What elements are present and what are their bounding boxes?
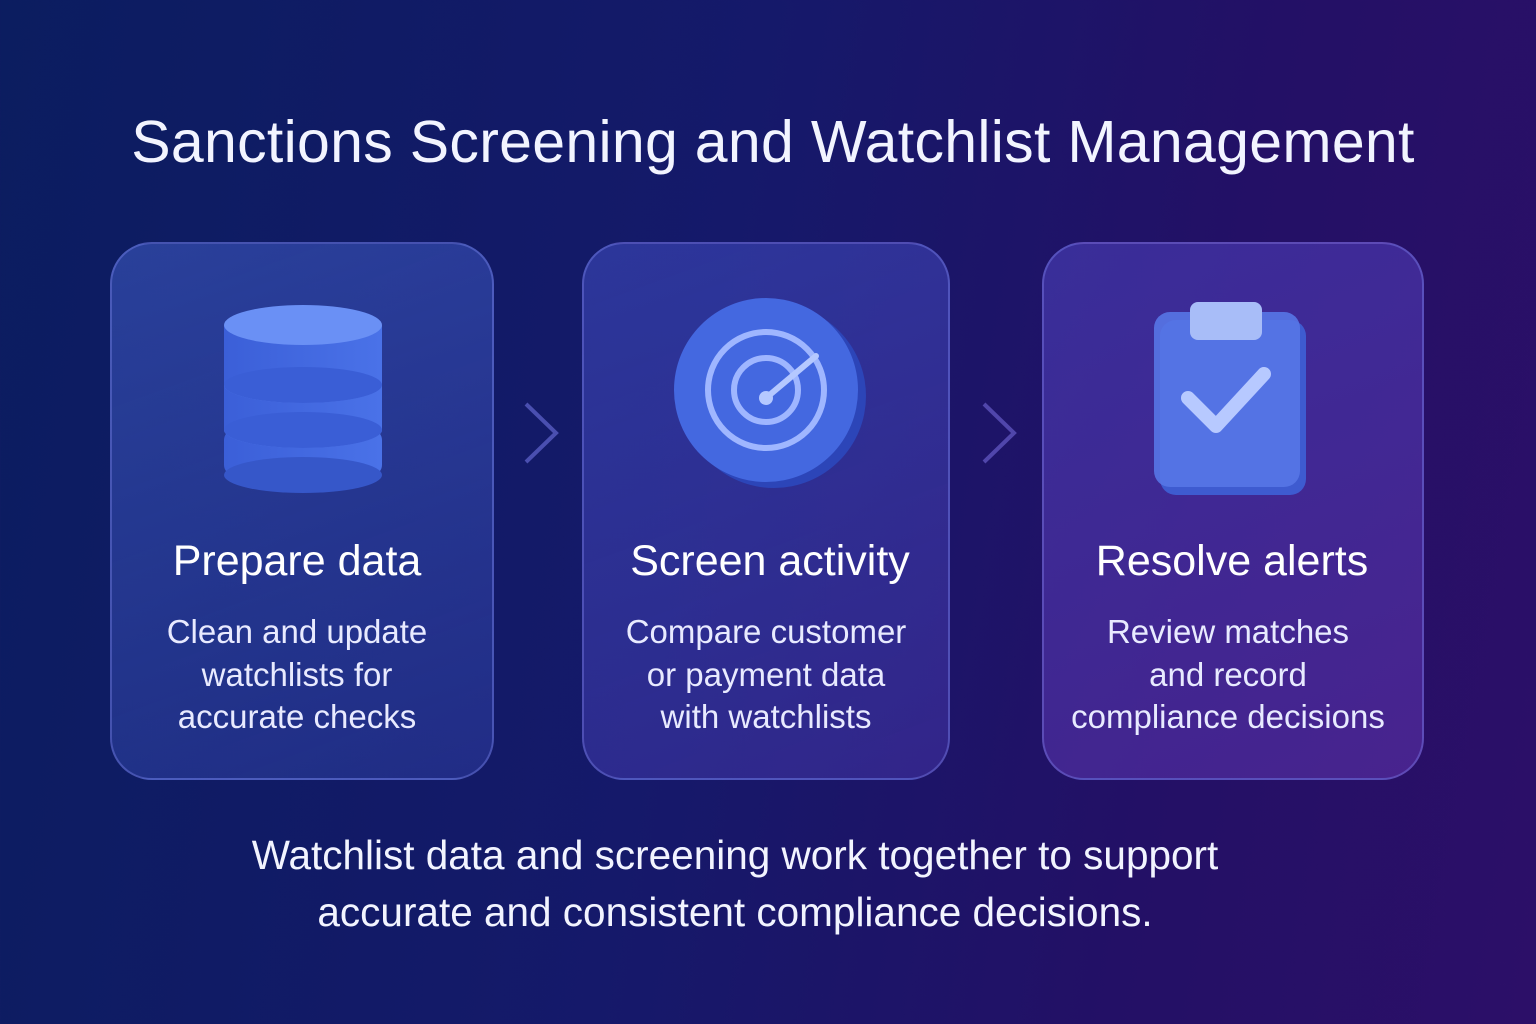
text: screen activity: Screen activity [630, 537, 910, 585]
icon: database [224, 305, 382, 493]
text: screen activity: with watchlists [661, 698, 871, 735]
text: resolve alerts: and record [1149, 656, 1307, 692]
text: resolve alerts: Review matches [1107, 613, 1349, 650]
footer text: Watchlist data and screening work together to support [252, 832, 1218, 878]
panel: prepare data [110, 242, 494, 780]
text: prepare data: Prepare data [173, 537, 421, 585]
text: resolve alerts [1071, 537, 1385, 735]
panel: resolve alerts [1042, 242, 1424, 780]
text: prepare data: watchlists for [202, 656, 392, 692]
text: resolve alerts: compliance decisions [1071, 698, 1385, 735]
text: prepare data: Clean and update [167, 613, 427, 650]
icon: clipboard check [1154, 302, 1306, 495]
footer text: accurate and consistent compliance decisions. [317, 889, 1153, 935]
title: Sanctions Screening and Watchlist Management [131, 109, 1415, 175]
text: resolve alerts: Resolve alerts [1096, 537, 1368, 585]
text: screen activity [626, 537, 910, 735]
text: screen activity: or payment data [647, 656, 885, 692]
panel: screen activity [582, 242, 950, 780]
icon: radar target [674, 298, 866, 488]
arrow: chevron 1 [524, 402, 559, 464]
arrow: chevron 2 [982, 402, 1017, 464]
text: prepare data: accurate checks [178, 698, 416, 735]
footer text [252, 832, 1218, 935]
text: prepare data [167, 537, 427, 735]
text: screen activity: Compare customer [626, 613, 906, 650]
